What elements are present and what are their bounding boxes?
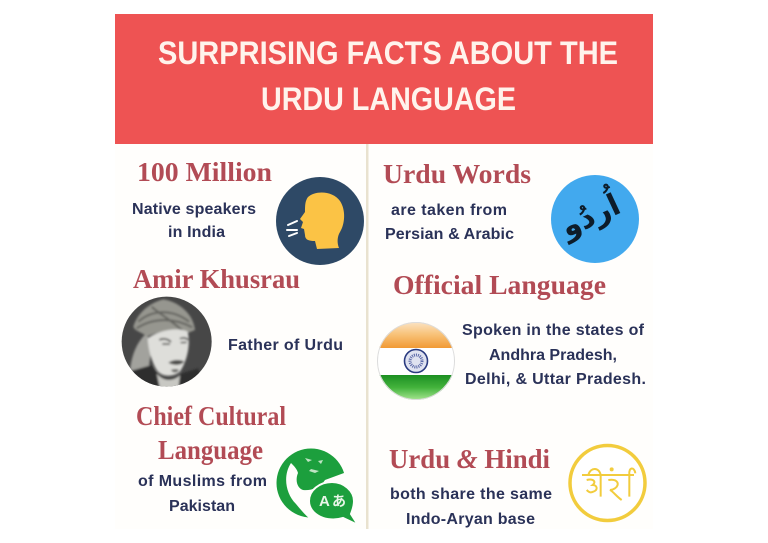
heading: 100 Million: 100 Million <box>137 157 272 187</box>
text: share the same base: Indo-Aryan base <box>406 511 535 528</box>
heading: Urdu and Hindi: Urdu & Hindi <box>389 444 550 474</box>
text: of Muslims from Pakistan: of Muslims from <box>138 473 267 490</box>
text: of Muslims from Pakistan <box>138 473 267 515</box>
icon: portrait <box>122 296 212 387</box>
text: of Muslims from Pakistan: Pakistan <box>169 498 235 515</box>
panel: Urdu words <box>383 159 639 263</box>
icon: green globe and speech bubble: A <box>319 493 330 510</box>
heading: Urdu Words: Urdu Words <box>383 159 531 189</box>
icon: India flag <box>377 322 455 400</box>
panel: Urdu and Hindi <box>389 444 645 528</box>
icon: green globe and speech bubble <box>276 448 358 525</box>
icon: Urdu script circle: اُردُو <box>551 182 626 246</box>
heading: Amir Khusrau: Amir Khusrau <box>133 264 300 294</box>
panel: Amir Khusrau <box>118 264 343 390</box>
icon: speaking head <box>276 177 364 265</box>
title: SURPRISING FACTS ABOUT THE <box>158 35 618 71</box>
icon: green globe and speech bubble: あ <box>332 493 346 509</box>
title <box>158 35 618 117</box>
text: father of Urdu: Father of Urdu <box>228 337 343 354</box>
title: URDU LANGUAGE <box>261 81 516 117</box>
heading: chief cultural language <box>136 401 286 465</box>
text: taken from Persian and Arabic: Persian & Arabic <box>385 226 514 243</box>
panel: official language <box>377 270 646 400</box>
text: share the same base <box>390 486 552 528</box>
text: share the same base: both share the same <box>390 486 552 503</box>
panel: 100 million <box>132 157 364 265</box>
heading: official language: Official Language <box>393 270 606 300</box>
icon: Urdu script circle <box>551 175 639 263</box>
text: taken from Persian and Arabic <box>385 202 514 243</box>
icon: Hindi circle <box>570 446 645 520</box>
text: spoken in states: Spoken in the states of <box>462 322 645 339</box>
heading: chief cultural language: Chief Cultural <box>136 401 286 431</box>
panel: chief cultural language <box>136 401 358 525</box>
text: taken from Persian and Arabic: are taken from <box>391 202 507 219</box>
text: spoken in states: Delhi, & Uttar Pradesh. <box>465 371 646 388</box>
text: native speakers <box>132 201 256 241</box>
text: native speakers: in India <box>168 224 225 241</box>
text: native speakers: Native speakers <box>132 201 256 218</box>
panel: infographic background <box>115 144 653 529</box>
title banner <box>115 14 653 144</box>
text: spoken in states: Andhra Pradesh, <box>489 347 617 364</box>
heading: chief cultural language: Language <box>158 435 263 465</box>
text: spoken in states <box>462 322 646 388</box>
